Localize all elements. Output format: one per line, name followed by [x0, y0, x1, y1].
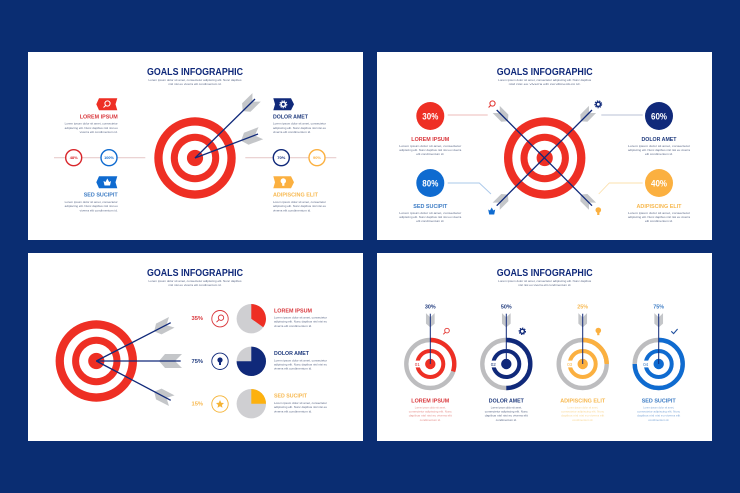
target 02 navy: 02	[491, 362, 496, 367]
badge 60%: 60%	[651, 112, 667, 122]
panel: top-left target with ribbons	[28, 52, 363, 240]
label: lorem ipsum	[399, 137, 462, 156]
label: dolor amet: DOLOR AMET	[642, 137, 677, 143]
target 03 yellow: 03	[567, 362, 573, 367]
timeline left	[54, 150, 145, 166]
timeline right: 90%	[313, 155, 321, 160]
label: dolor amet: DOLOR AMET	[273, 115, 308, 121]
label: dolor amet: condimentum id.	[496, 418, 517, 422]
label: sed sucipit: SED SUCIPIT	[413, 204, 448, 210]
ribbon: navy gear	[273, 98, 294, 110]
label: dolor amet: dapibus nisl nisi eu viverra elit	[485, 414, 528, 418]
target 01 red	[406, 304, 454, 388]
label: lorem ipsum: LOREM IPSUM	[411, 398, 449, 404]
target 02 navy	[482, 304, 530, 388]
label: lorem ipsum: LOREM IPSUM	[411, 137, 449, 143]
target	[504, 117, 585, 199]
title: GOALS INFOGRAPHIC	[147, 268, 243, 279]
crossed arrows	[493, 106, 596, 210]
label: sed sucipit: Lorem ipsum dolor sit amet,	[643, 406, 674, 410]
badge 80%	[416, 169, 444, 197]
label: dolor amet: adipiscing elit. Nunc dapibus nisl nisi eu viverra	[628, 148, 690, 152]
ribbon: blue crown	[96, 176, 117, 188]
label: dolor amet: DOLOR AMET	[274, 351, 309, 357]
label: adipiscing elit: ADIPISCING ELIT	[273, 193, 318, 199]
target	[154, 117, 236, 199]
percentages: 75%	[191, 359, 203, 365]
pie 35%	[237, 304, 266, 333]
label: adipiscing elit: adipiscing elit. Nunc dapibus nisl nisi eu	[273, 204, 326, 208]
label: lorem ipsum: adipiscing elit. Nunc dapibus nisl nisi eu	[65, 126, 118, 130]
label: dolor amet: viverra elit condimentum id.	[274, 367, 312, 371]
subtitle	[148, 279, 242, 287]
label: adipiscing elit: ADIPISCING ELIT	[560, 398, 606, 404]
label: sed sucipit: SED SUCIPIT	[274, 394, 307, 400]
label: adipiscing elit: consectetur adipiscing elit. Nunc	[561, 410, 605, 414]
label: sed sucipit	[399, 204, 462, 223]
timeline right	[245, 150, 336, 166]
label: sed sucipit: consectetur adipiscing elit. Nunc	[637, 410, 681, 414]
label: sed sucipit: Lorem ipsum dolor sit amet, consectetur	[399, 211, 461, 215]
icon: magnifier	[489, 101, 495, 108]
label: sed sucipit: condimentum id.	[648, 418, 669, 422]
label: lorem ipsum: LOREM IPSUM	[80, 115, 118, 121]
label: lorem ipsum: consectetur adipiscing elit. Nunc	[409, 410, 452, 414]
label: sed sucipit: adipiscing elit. Nunc dapibus nisl nisi eu viverra	[399, 215, 462, 219]
target 01 red: 30%	[425, 304, 436, 310]
label: sed sucipit: Lorem ipsum dolor sit amet, consectetur	[274, 401, 327, 405]
label: sed sucipit: dapibus nisl nisi eu viverra elit	[637, 414, 680, 418]
label: lorem ipsum: viverra elit condimentum id.	[274, 324, 312, 328]
label: adipiscing elit	[273, 193, 326, 212]
icon: star circle	[212, 396, 228, 412]
label: dolor amet: Lorem ipsum dolor sit amet, consectetur	[274, 358, 327, 362]
label: adipiscing elit	[560, 398, 606, 422]
icon: crown	[488, 208, 495, 214]
label: lorem ipsum	[274, 308, 327, 328]
label: sed sucipit: elit condimentum id.	[416, 219, 445, 223]
ribbon: red search	[96, 98, 117, 110]
label: adipiscing elit: elit condimentum id.	[645, 219, 673, 223]
title: GOALS INFOGRAPHIC	[497, 67, 593, 78]
subtitle: nisl nisi eu viverra elit condimentum id.	[168, 82, 222, 86]
panel: bottom-right four targets	[377, 253, 712, 441]
subtitle	[148, 78, 242, 86]
percentages: 15%	[191, 401, 203, 407]
label: lorem ipsum	[65, 115, 118, 134]
label: dolor amet: adipiscing elit. Nunc dapibus nisl nisi eu	[274, 362, 327, 366]
label: lorem ipsum: elit condimentum id.	[416, 152, 445, 156]
label: dolor amet: consectetur adipiscing elit. Nunc	[485, 410, 528, 414]
label: sed sucipit	[637, 398, 681, 422]
panel: top-right crossed arrows	[377, 52, 712, 240]
percentages: 35%	[191, 316, 203, 322]
target 03 yellow: 25%	[577, 304, 588, 310]
label: sed sucipit: SED SUCIPIT	[84, 193, 118, 199]
icon: gear	[595, 101, 602, 108]
label: lorem ipsum	[409, 398, 452, 422]
label: dolor amet	[485, 398, 528, 422]
label: lorem ipsum: Lorem ipsum dolor sit amet,	[415, 406, 446, 410]
label: adipiscing elit: dapibus nisl nisi eu viverra elit	[561, 414, 604, 418]
connectors	[448, 115, 643, 194]
target 03 yellow	[559, 304, 607, 388]
label: adipiscing elit: Lorem ipsum dolor sit amet, consectetur	[273, 200, 326, 204]
target 01 red: 01	[415, 362, 420, 367]
subtitle: nisl nisi eu viverra elit condimentum id.	[518, 283, 571, 287]
label: dolor amet	[274, 351, 327, 371]
label: sed sucipit: Lorem ipsum dolor sit amet, consectetur	[65, 200, 118, 204]
label: adipiscing elit	[628, 204, 690, 223]
target 04 blue: 04	[643, 362, 649, 367]
icon: bulb circle	[212, 353, 228, 369]
badge 40%: 40%	[651, 178, 667, 190]
label: dolor amet: Lorem ipsum dolor sit amet,	[491, 406, 522, 410]
label: sed sucipit: viverra elit condimentum id.	[274, 409, 312, 413]
label: dolor amet: adipiscing elit. Nunc dapibus nisl nisi eu	[273, 126, 326, 130]
label: adipiscing elit: Lorem ipsum dolor sit amet,	[567, 406, 598, 410]
label: sed sucipit: adipiscing elit. Nunc dapibus nisl nisi eu	[65, 204, 118, 208]
timeline right: 70%	[277, 155, 286, 160]
icon: magnifier circle	[212, 310, 228, 327]
label: dolor amet: DOLOR AMET	[489, 398, 524, 404]
badge 40%	[645, 169, 673, 197]
subtitle: Lorem ipsum dolor sit amet, consectetur adipiscing elit. Nunc dapibus	[148, 78, 242, 82]
icon: bulb	[596, 207, 601, 215]
subtitle: Lorem ipsum dolor sit amet, consectetur adipiscing elit. Nunc dapibus	[148, 279, 242, 283]
panel: bottom-left target with pies	[28, 253, 363, 441]
label: sed sucipit	[274, 394, 327, 413]
pie 25%	[237, 389, 266, 418]
label: adipiscing elit: viverra elit condimentum id.	[273, 208, 311, 212]
label: dolor amet	[273, 115, 326, 134]
label: sed sucipit: adipiscing elit. Nunc dapibus nisl nisi eu	[274, 405, 327, 409]
label: sed sucipit: viverra elit condimentum id.	[80, 208, 118, 212]
arrow upper	[195, 93, 261, 158]
label: lorem ipsum: adipiscing elit. Nunc dapibus nisl nisi eu	[274, 320, 327, 324]
label: lorem ipsum: Lorem ipsum dolor sit amet, consectetur	[399, 144, 461, 148]
arrow lower	[195, 127, 263, 158]
badge 30%: 30%	[422, 112, 439, 122]
label: dolor amet: Lorem ipsum dolor sit amet, consectetur	[628, 144, 690, 148]
subtitle	[498, 279, 592, 287]
title: GOALS INFOGRAPHIC	[147, 67, 243, 78]
badge 60%	[645, 102, 673, 130]
subtitle: Lorem ipsum dolor sit amet, consectetur adipiscing elit. Nunc dapibus	[498, 279, 592, 283]
subtitle: nisl nisi eu viverra elit condimentum id.	[168, 283, 222, 287]
timeline left: 48%	[70, 155, 78, 160]
target 02 navy: 50%	[501, 304, 512, 310]
ribbon: yellow bulb	[273, 176, 294, 188]
percentages	[191, 316, 203, 407]
label: sed sucipit: SED SUCIPIT	[642, 398, 676, 404]
arrows	[96, 317, 182, 406]
label: lorem ipsum: Lorem ipsum dolor sit amet, consectetur	[274, 316, 327, 320]
badge 30%	[416, 102, 444, 130]
label: lorem ipsum: dapibus nisl nisi eu viverra elit	[409, 414, 452, 418]
subtitle: nisl nisi eu viverra elit condimentum id.	[509, 82, 581, 86]
label: dolor amet: viverra elit condimentum id.	[273, 130, 311, 134]
subtitle	[498, 78, 592, 86]
label: adipiscing elit: ADIPISCING ELIT	[636, 204, 682, 210]
target 04 blue	[635, 304, 683, 388]
label: sed sucipit	[65, 193, 118, 212]
label: dolor amet: Lorem ipsum dolor sit amet, consectetur	[273, 122, 326, 126]
label: lorem ipsum: condimentum id.	[420, 418, 441, 422]
target	[56, 320, 137, 402]
label: lorem ipsum: LOREM IPSUM	[274, 308, 312, 314]
label: lorem ipsum: Lorem ipsum dolor sit amet, consectetur	[65, 122, 118, 126]
label: adipiscing elit: adipiscing elit. Nunc dapibus nisl nisi eu viverra	[628, 215, 690, 219]
badge 80%: 80%	[422, 178, 439, 190]
label: dolor amet: elit condimentum id.	[645, 152, 673, 156]
title: GOALS INFOGRAPHIC	[497, 268, 593, 279]
subtitle: Lorem ipsum dolor sit amet, consectetur adipiscing elit. Nunc dapibus	[498, 78, 592, 82]
label: lorem ipsum: viverra elit condimentum id.	[80, 130, 118, 134]
label: dolor amet	[628, 137, 690, 156]
pie 75%	[237, 347, 266, 376]
timeline left: 100%	[104, 156, 114, 160]
target 04 blue: 75%	[653, 304, 664, 310]
label: adipiscing elit: condimentum id.	[572, 418, 593, 422]
label: lorem ipsum: adipiscing elit. Nunc dapibus nisl nisi eu viverra	[399, 148, 462, 152]
label: adipiscing elit: Lorem ipsum dolor sit amet, consectetur	[628, 211, 690, 215]
